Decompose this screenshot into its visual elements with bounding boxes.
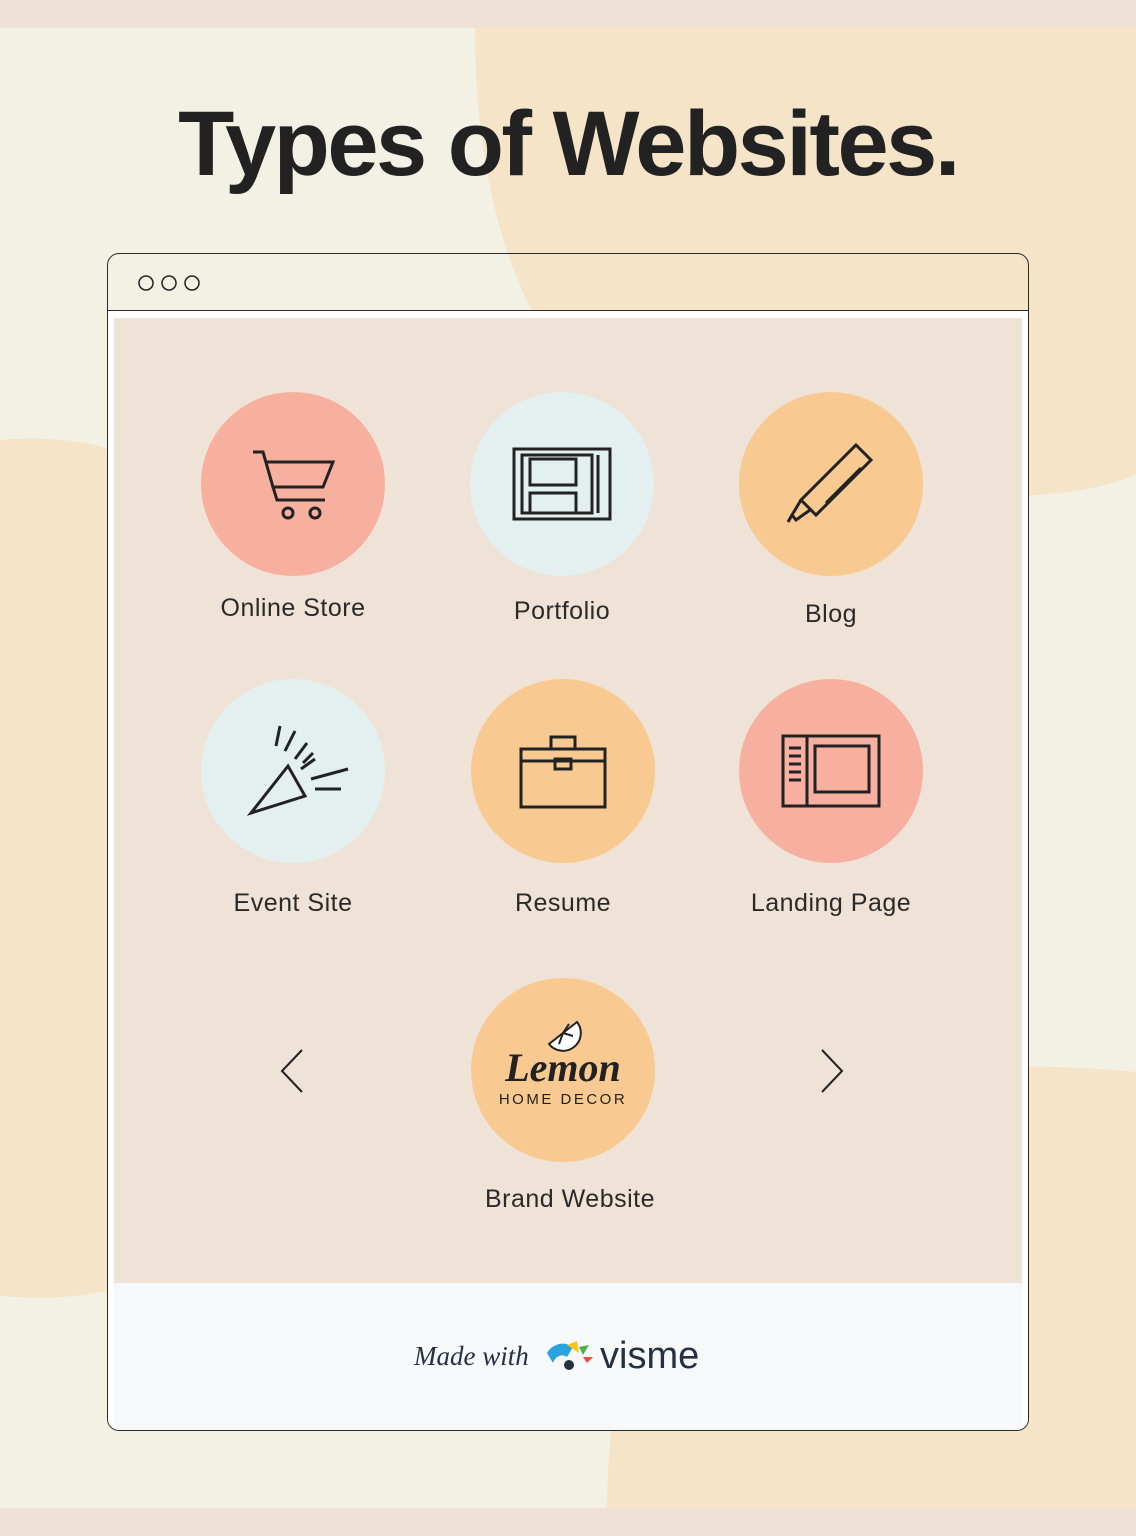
item: brand website: Lemon <box>505 1045 621 1090</box>
item: online store <box>201 392 385 622</box>
item: landing page <box>739 679 923 917</box>
arrow: left <box>280 1049 303 1093</box>
item: portfolio: Portfolio <box>514 597 610 625</box>
item: event site: Event Site <box>234 889 352 917</box>
browser header dots <box>138 275 200 291</box>
item: resume <box>471 679 655 917</box>
item: portfolio <box>470 392 654 625</box>
arrow: right <box>821 1049 844 1093</box>
item: online store: Online Store <box>221 594 365 622</box>
item: brand website: Brand Website <box>485 1185 655 1213</box>
item: brand website: HOME DECOR <box>499 1091 627 1108</box>
item: resume: Resume <box>515 889 611 917</box>
footer <box>114 1283 1022 1433</box>
item: blog <box>739 392 923 628</box>
item: brand website <box>471 978 655 1213</box>
browser window <box>107 253 1029 1431</box>
footer: made with visme <box>414 1335 699 1377</box>
title: Types of Websites. <box>178 93 958 195</box>
icon: lemon <box>548 1020 582 1052</box>
footer: made with visme: Made with <box>414 1341 529 1371</box>
footer: made with visme: visme <box>600 1335 699 1377</box>
content panel <box>114 318 1022 1283</box>
item: blog: Blog <box>805 600 857 628</box>
item: event site <box>201 679 385 917</box>
item: landing page: Landing Page <box>751 889 911 917</box>
